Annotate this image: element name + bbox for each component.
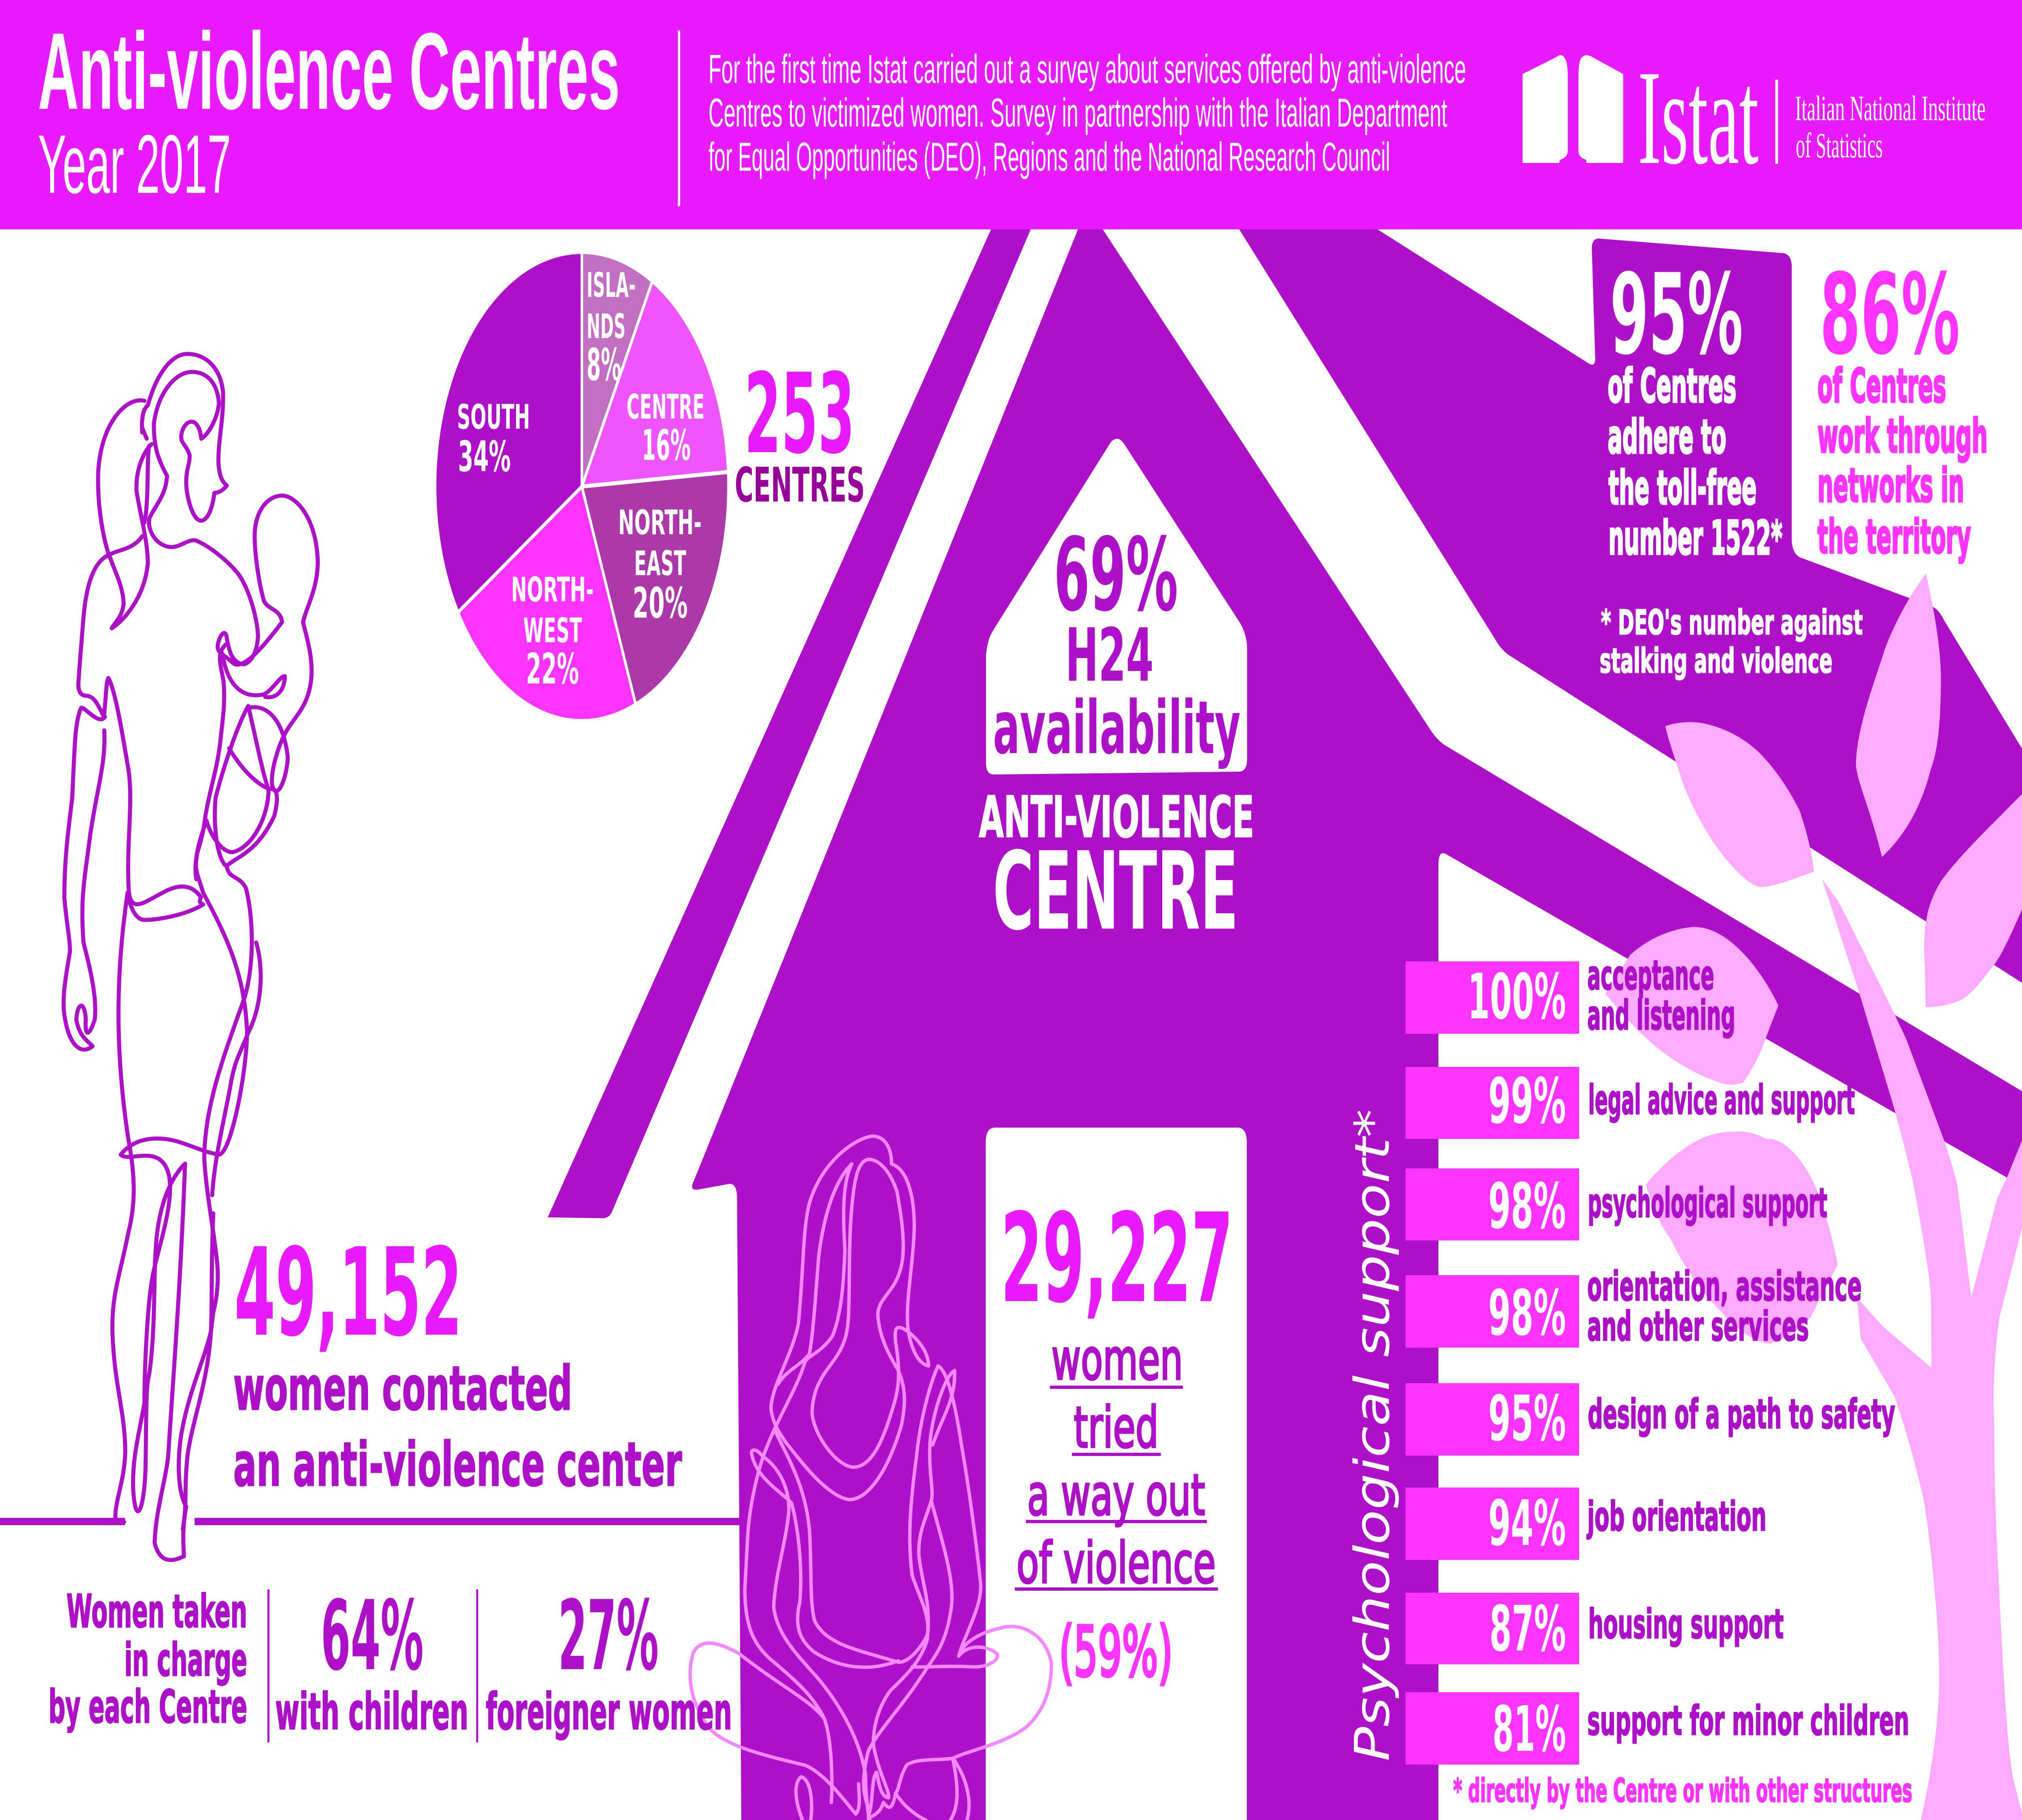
tree with leaves [1605, 574, 2022, 1820]
leaf 1 [1856, 574, 1941, 857]
pie labels: NORTH- [618, 503, 702, 542]
stat: 86% networks: 86% [1820, 250, 1960, 380]
stat: 29,227 women tried a way out: a way out [1027, 1462, 1205, 1528]
bar: orientation, assistance: orientation, assistance [1587, 1263, 1862, 1310]
logo: Istat [1523, 43, 1986, 193]
stat: 95% adhere: number 1522* [1609, 511, 1782, 565]
slice: islands [582, 252, 652, 487]
stat: 49,152 women contacted: women contacted [233, 1354, 572, 1424]
stat: 49,152 women contacted: an anti-violence center [233, 1430, 682, 1500]
bar: design of a path to safety: 95% [1488, 1382, 1566, 1455]
anti-violence centre label: ANTI-VIOLENCE [979, 784, 1254, 851]
stat: 86% networks: of Centres [1817, 359, 1946, 413]
pie labels: 22% [526, 645, 579, 694]
stat: 29,227 women tried a way out: women [1051, 1327, 1183, 1393]
bar: legal advice and support [1406, 1065, 1855, 1139]
title: Anti-violence Centres [38, 10, 620, 132]
pie labels: 34% [458, 433, 511, 481]
intro text [709, 47, 1466, 180]
stat: 29,227 women tried a way out [1000, 1187, 1233, 1692]
header bar [0, 0, 2022, 229]
bar: legal advice and support: legal advice and support [1588, 1077, 1855, 1124]
intro text: Centres to victimized women. Survey in partnership with the Italian Department [709, 90, 1447, 135]
logo: Istat: Istat [1638, 43, 1759, 193]
pie labels: 20% [632, 579, 688, 628]
women taken in charge label: by each Centre [49, 1681, 247, 1734]
slice: south [435, 252, 582, 612]
pie labels: 8% [587, 339, 621, 391]
bar: orientation, assistance [1406, 1263, 1862, 1350]
women taken in charge label: Women taken [66, 1585, 247, 1638]
stat: 29,227 women tried a way out: (59%) [1059, 1612, 1173, 1692]
footnote: DEO number: * DEO's number against [1601, 603, 1863, 642]
leaf 5 [1646, 1132, 1838, 1344]
stat: 95% adhere [1608, 250, 1783, 565]
pie labels: CENTRE [626, 387, 704, 427]
leaf 2 [1665, 722, 1814, 887]
stat: 49,152 women contacted [233, 1222, 682, 1500]
bar: support for minor children: 81% [1493, 1693, 1566, 1766]
leaf 4 [1605, 927, 1779, 1085]
stat: 95% adhere: the toll-free [1609, 461, 1757, 515]
illustration: standing woman with child [63, 354, 318, 1560]
stat: 29,227 women tried a way out: 29,227 [1000, 1187, 1233, 1330]
anti-violence centre label: CENTRE [993, 829, 1239, 954]
slice: centre [582, 281, 728, 487]
stat: 69% availability: 69% [1054, 517, 1178, 634]
bar: legal advice and support: 99% [1488, 1065, 1566, 1138]
stat: 69% availability: H24 [1065, 613, 1154, 698]
bar: housing support: 87% [1489, 1593, 1566, 1666]
stat: 253 centres [735, 350, 865, 513]
stat: 64% with children: 64% [321, 1580, 423, 1692]
bar: design of a path to safety: design of a path to safety [1588, 1391, 1895, 1438]
stat: 29,227 women tried a way out: of violence [1017, 1530, 1216, 1596]
anti-violence centre label [979, 784, 1254, 954]
pie labels: NORTH- [511, 570, 594, 609]
stat: 27% foreigner women: 27% [558, 1580, 659, 1692]
pie chart: centres by area [435, 252, 728, 721]
bar: job orientation: job orientation [1586, 1493, 1766, 1540]
stat: 27% foreigner women: foreigner women [486, 1683, 732, 1741]
pie labels: ISLA- [587, 265, 636, 305]
stat: 27% foreigner women [476, 1580, 732, 1742]
stat: 49,152 women contacted: 49,152 [234, 1222, 462, 1363]
bar: psychological support: 98% [1488, 1170, 1566, 1243]
logo: Istat: Italian National Institute [1795, 89, 1986, 128]
stat: 64% with children [267, 1580, 468, 1742]
pie labels: SOUTH [457, 397, 530, 437]
bar: job orientation [1406, 1487, 1766, 1560]
house body [692, 229, 2022, 1820]
pie labels: EAST [634, 544, 686, 583]
bar: psychological support: psychological support [1588, 1180, 1827, 1227]
stat: 69% availability [993, 517, 1241, 770]
stat: 95% adhere: of Centres [1608, 359, 1736, 413]
stat: 29,227 women tried a way out: tried [1074, 1395, 1159, 1461]
white availability house [986, 439, 1247, 775]
tree trunk [1822, 879, 2022, 1820]
stat: 69% availability: availability [993, 685, 1240, 770]
bar: orientation, assistance: 98% [1488, 1277, 1566, 1350]
bar: support for minor children: support for minor children [1587, 1697, 1909, 1744]
intro text: For the first time Istat carried out a survey about services offered by anti-violence [709, 47, 1466, 92]
stat: 86% networks: networks in [1817, 458, 1964, 513]
footnote: directly by the centre: * directly by the Centre or with other structures [1453, 1772, 1912, 1809]
intro text: for Equal Opportunities (DEO), Regions and the National Research Council [709, 134, 1390, 180]
slice: north-east [582, 472, 728, 705]
white panel: way out [986, 1128, 1247, 1820]
bar: acceptance and listening: and listening [1587, 992, 1735, 1039]
upper roof wedge [1239, 229, 2022, 983]
bar: housing support [1406, 1593, 1784, 1666]
footnote: DEO number: stalking and violence [1600, 641, 1832, 681]
roof stripe [548, 229, 1031, 1218]
bar: acceptance and listening: acceptance [1587, 952, 1714, 999]
bar: acceptance and listening: 100% [1468, 961, 1566, 1033]
pie labels [457, 265, 704, 694]
pie labels: 16% [642, 421, 691, 470]
bar: housing support: housing support [1588, 1601, 1784, 1648]
women taken in charge label [49, 1585, 247, 1734]
subtitle: Year 2017 [38, 118, 231, 211]
logo: Istat: of Statistics [1796, 126, 1883, 165]
illustration: seated woman [690, 1136, 1051, 1820]
stat: 64% with children: with children [275, 1683, 468, 1741]
women taken in charge label: in charge [125, 1634, 247, 1687]
stat: 95% adhere: 95% [1610, 250, 1743, 380]
header divider [678, 30, 680, 206]
bar: support for minor children [1406, 1692, 1909, 1766]
bar: job orientation: 94% [1488, 1487, 1566, 1560]
service bars [1406, 952, 1909, 1766]
stat: 86% networks [1817, 250, 1988, 564]
stat: 253 centres: 253 [745, 350, 855, 478]
stat: 95% adhere: adhere to [1608, 410, 1726, 464]
bar: psychological support [1406, 1168, 1827, 1243]
stat: 86% networks: the territory [1817, 510, 1971, 564]
bar: design of a path to safety [1406, 1382, 1895, 1456]
stat: 253 centres: CENTRES [735, 458, 865, 513]
baseline rule [0, 1518, 740, 1525]
heading: psychological support: Psychological support* [1345, 1109, 1400, 1761]
bar: orientation, assistance: and other services [1587, 1303, 1809, 1350]
slice: north-west [458, 487, 636, 721]
pie labels: WEST [523, 611, 582, 650]
leaf 3 [1924, 794, 2022, 1007]
footnote: DEO number [1600, 603, 1863, 681]
bar: acceptance and listening [1406, 952, 1735, 1039]
pie labels: NDS [587, 307, 626, 346]
